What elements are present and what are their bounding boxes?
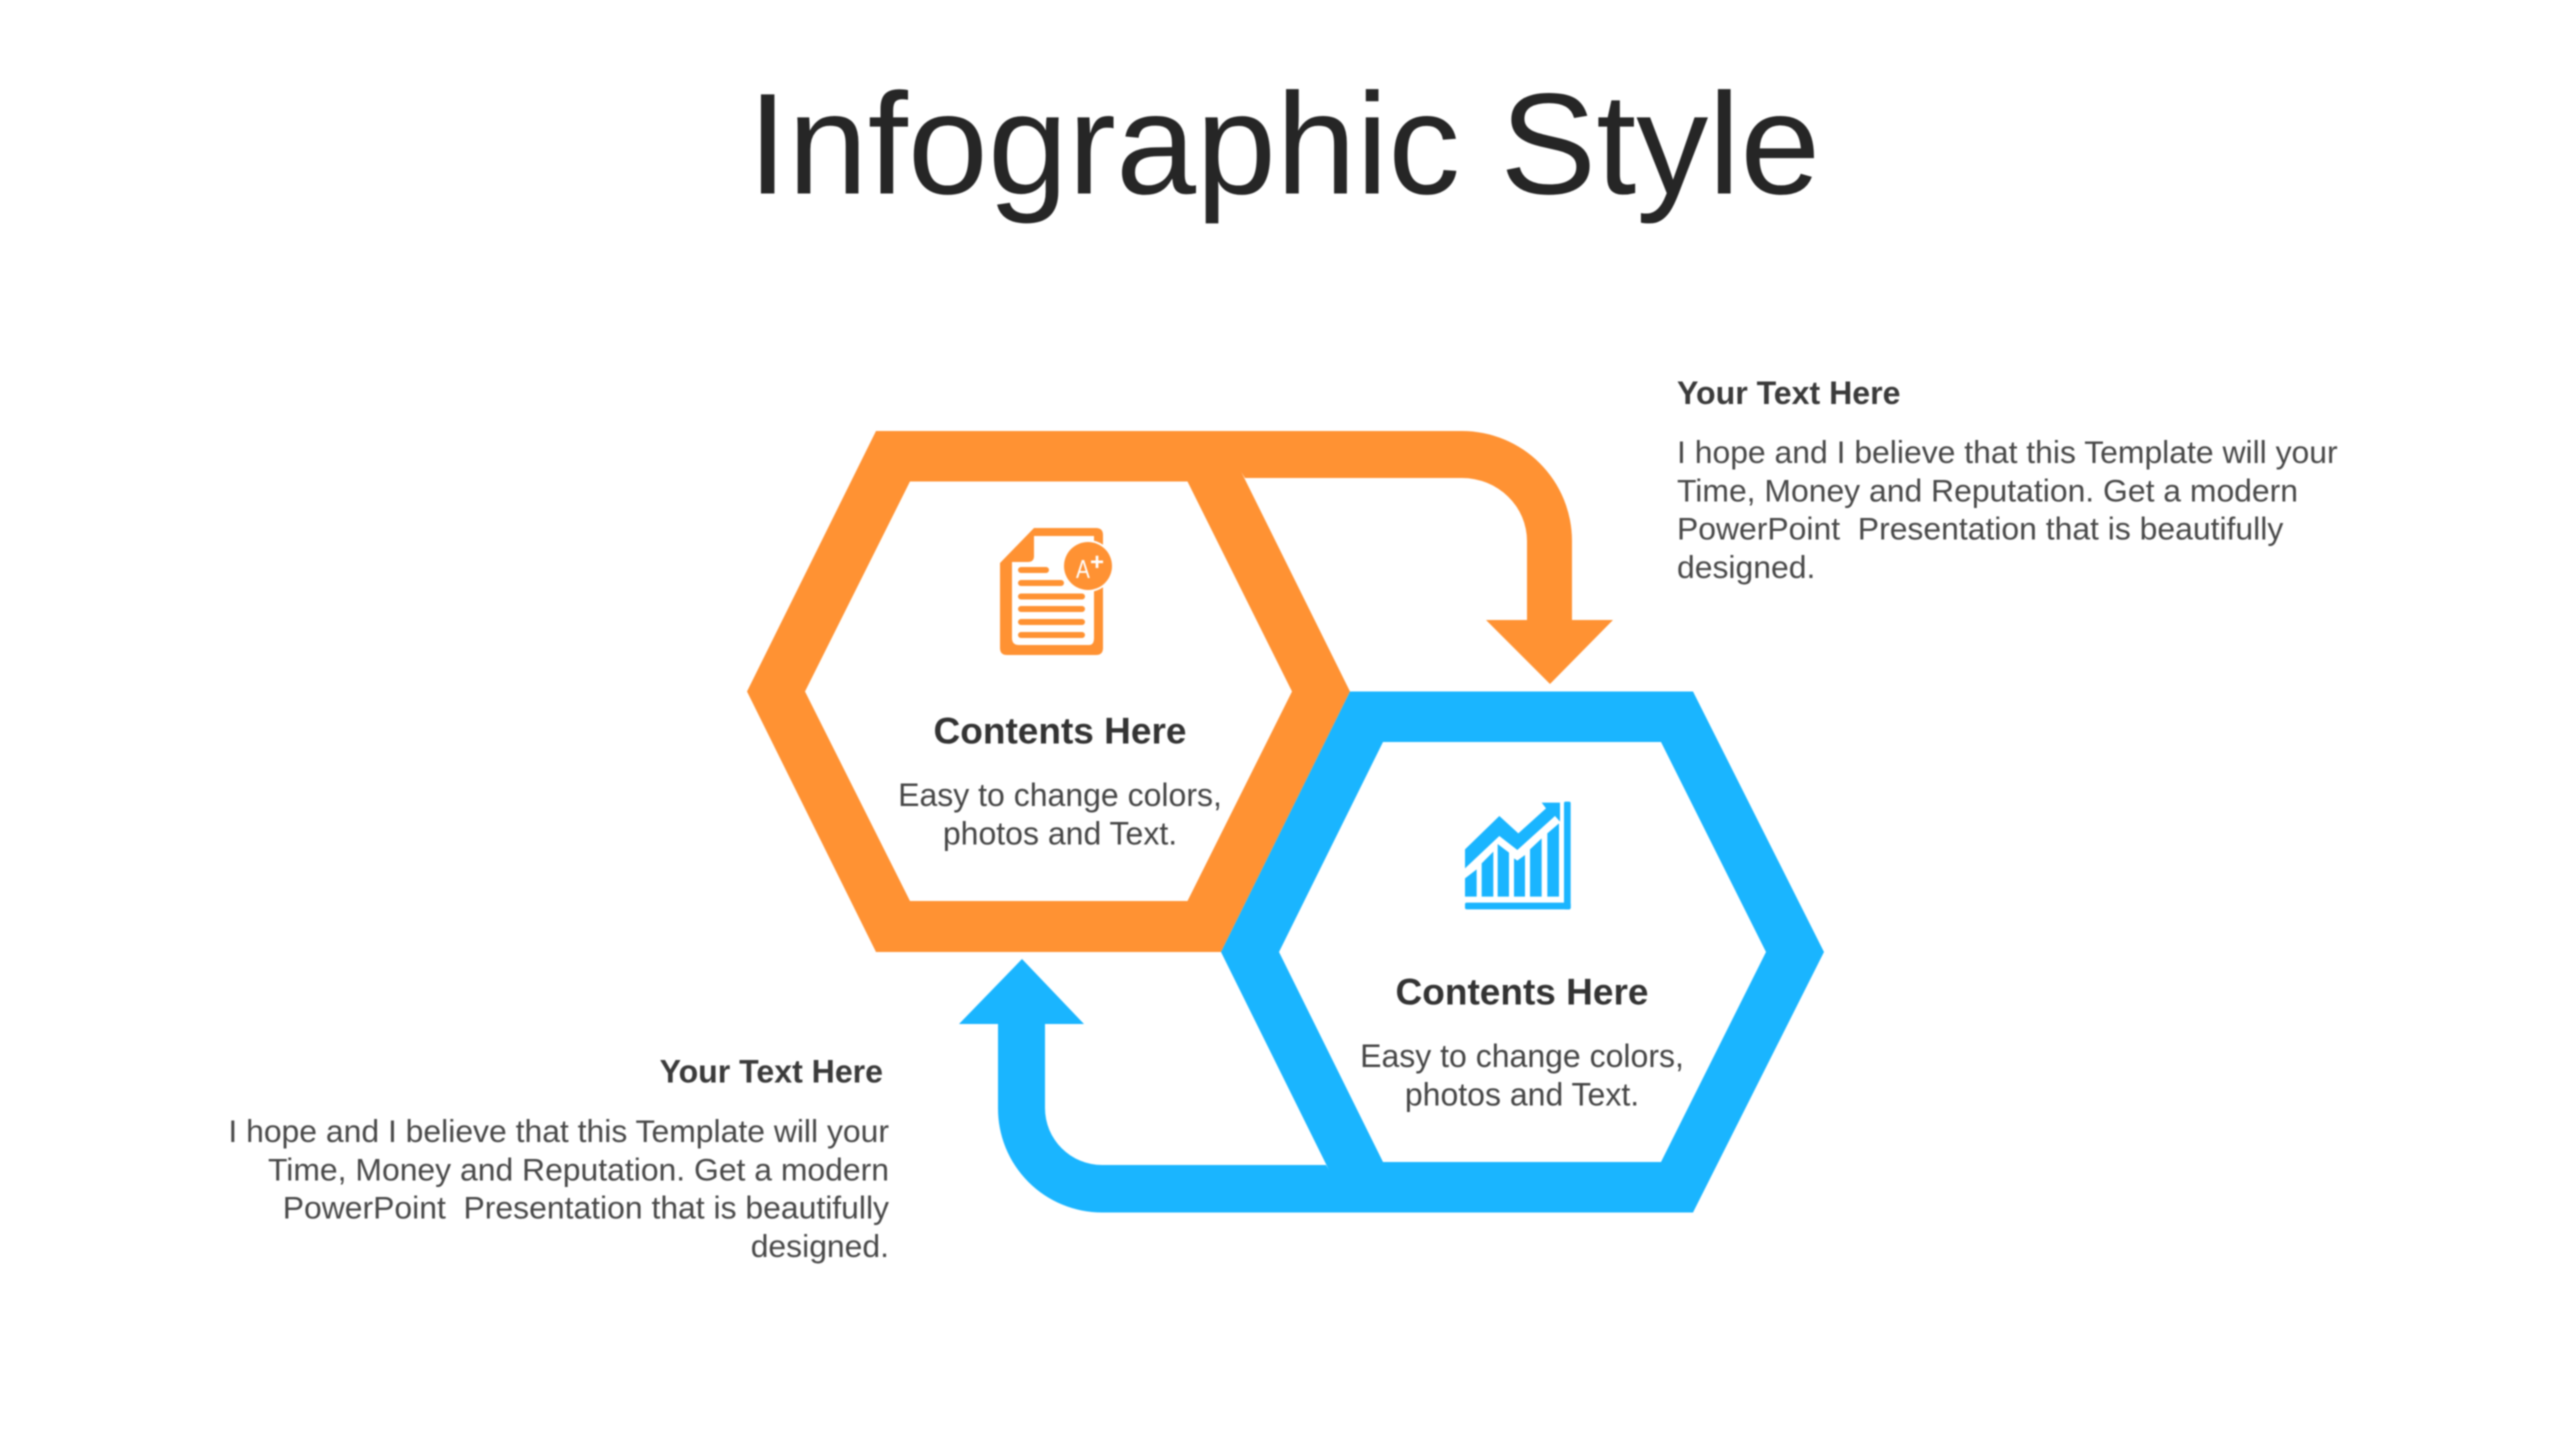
arrow: blue, from blue hexagon back to orange hexagon xyxy=(959,959,1356,1212)
text block: orange hexagon description: Easy to change colors, xyxy=(898,777,1222,813)
callout body: Time, Money and Reputation. Get a modern xyxy=(268,1151,889,1187)
heading: contents here, orange hexagon: Contents Here xyxy=(934,710,1186,752)
hexagon ring: blue xyxy=(1221,692,1824,1212)
callout body: I hope and I believe that this Template will your xyxy=(228,1113,889,1149)
panel: orange hexagon xyxy=(747,431,1350,952)
icon: rising bar chart xyxy=(1465,802,1571,909)
hexagon ring: orange xyxy=(747,431,1350,952)
text block: orange hexagon description: photos and Text. xyxy=(943,816,1177,852)
heading: contents here, blue hexagon: Contents Here xyxy=(1396,972,1648,1012)
icon: document with A+ grade xyxy=(1000,528,1114,655)
callout body: I hope and I believe that this Template will your xyxy=(1677,434,2338,470)
callout body: designed. xyxy=(1677,549,1815,585)
icon: document with A+ grade: A xyxy=(1076,555,1090,584)
callout heading: Your Text Here xyxy=(660,1054,883,1090)
callout body: PowerPoint Presentation that is beautifully xyxy=(283,1190,889,1226)
callout body: designed. xyxy=(751,1228,889,1264)
arrow: orange, from top hexagon to blue hexagon xyxy=(1215,431,1613,684)
callout body: PowerPoint Presentation that is beautifully xyxy=(1677,511,2283,547)
callout heading: Your Text Here xyxy=(1677,375,1900,411)
callout body: Time, Money and Reputation. Get a modern xyxy=(1677,472,2298,508)
callout: bottom left text xyxy=(228,1054,889,1264)
icon: document with A+ grade: + xyxy=(1090,549,1104,576)
callout: top right text xyxy=(1677,375,2338,585)
title: Infographic Style xyxy=(748,64,1820,224)
text block: blue hexagon description: Easy to change colors, xyxy=(1360,1038,1684,1074)
panel: blue hexagon xyxy=(1221,692,1824,1212)
text block: blue hexagon description: photos and Text. xyxy=(1405,1076,1639,1112)
